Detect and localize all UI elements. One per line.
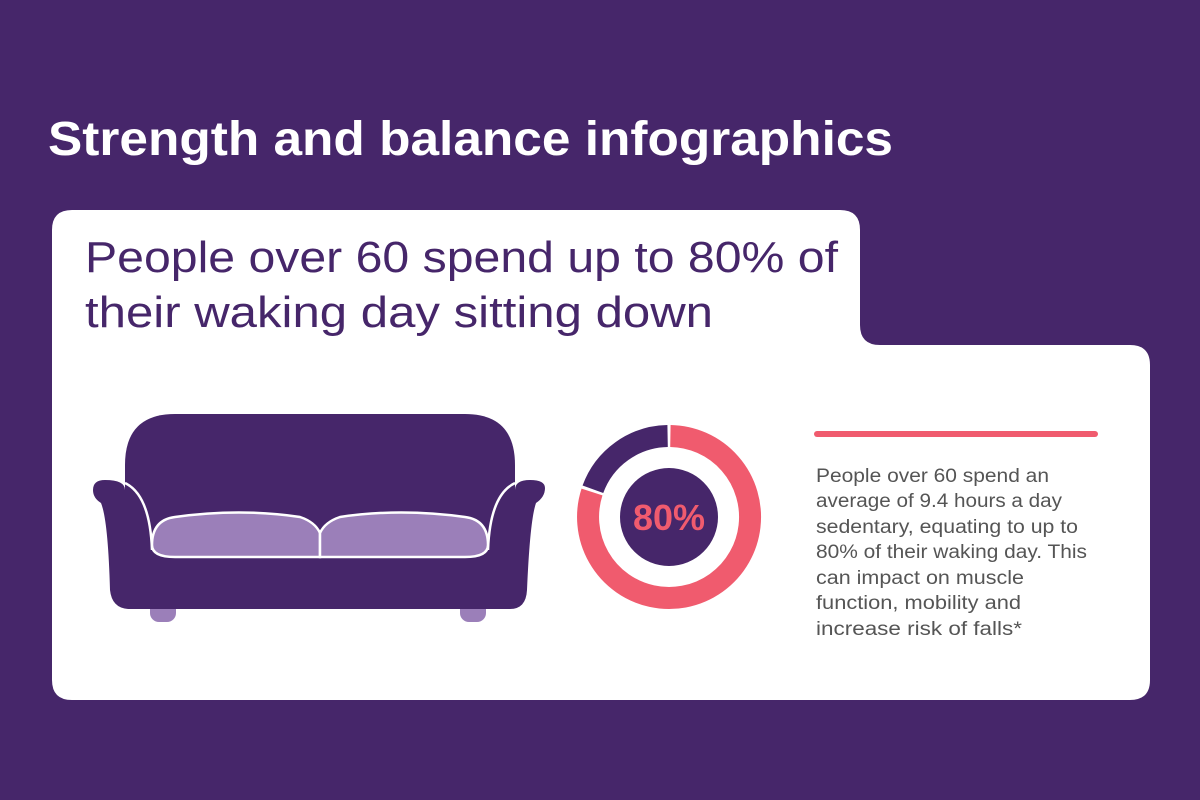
text block: description: People over 60 spend an — [816, 466, 1049, 487]
text block: description: can impact on muscle — [816, 568, 1024, 589]
text block: description: increase risk of falls* — [816, 619, 1023, 640]
heading: their waking day sitting down — [85, 288, 713, 337]
text block: description — [816, 466, 1087, 640]
text block: description: sedentary, equating to up to — [816, 517, 1078, 538]
text block: description: function, mobility and — [816, 593, 1021, 614]
text block: description: average of 9.4 hours a day — [816, 491, 1063, 512]
divider bar — [814, 431, 1098, 437]
text block: description: 80% of their waking day. This — [816, 542, 1087, 563]
title: Strength and balance infographics — [48, 113, 893, 166]
chart: donut 80%: 80% — [633, 497, 705, 538]
chart: donut 80% — [588, 436, 750, 598]
heading: People over 60 spend up to 80% of — [85, 233, 839, 282]
heading — [85, 233, 839, 337]
icon: sofa — [93, 414, 545, 622]
panel: white card — [52, 210, 1150, 700]
